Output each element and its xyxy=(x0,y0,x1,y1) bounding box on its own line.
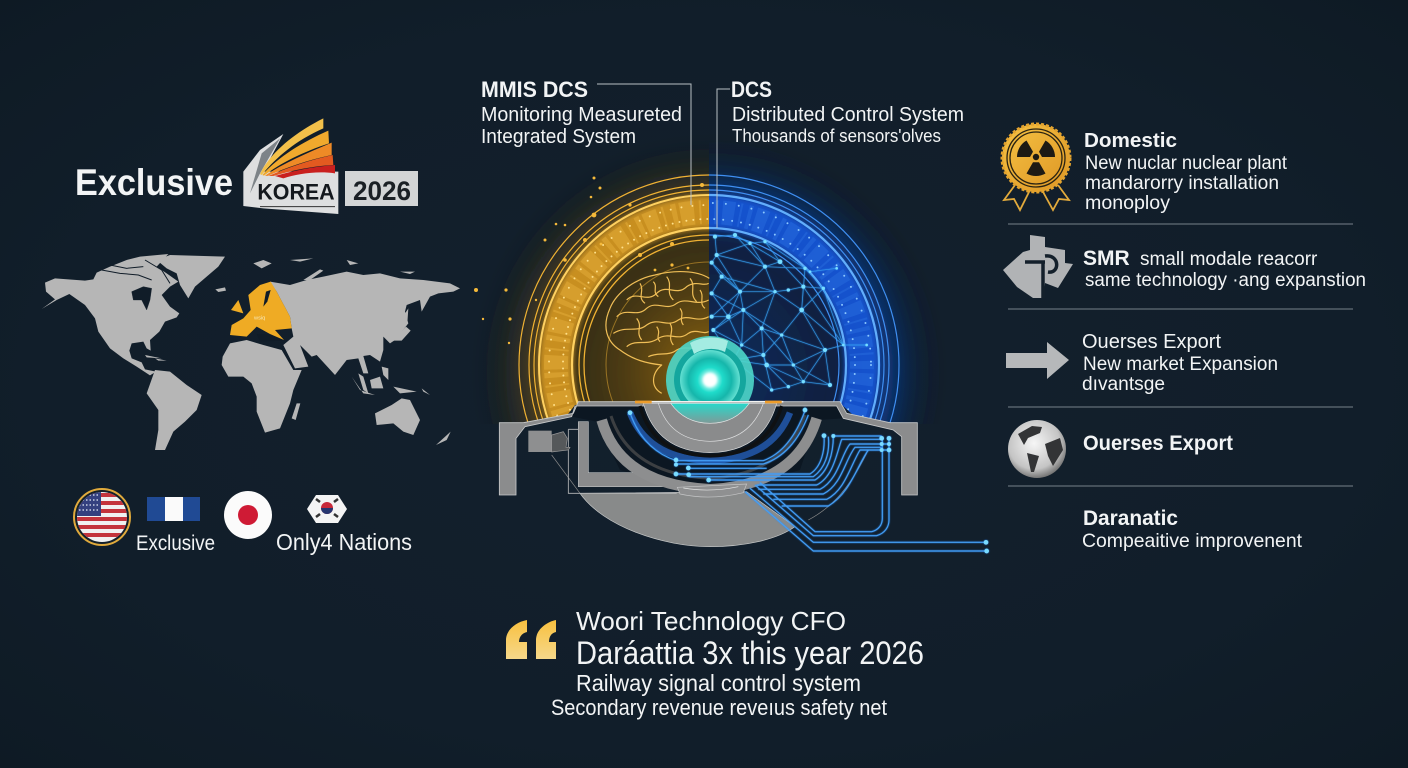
lower bowl xyxy=(580,492,795,547)
deck highlight xyxy=(635,399,783,404)
item: overseas export with globe xyxy=(1008,420,1233,478)
item: Daranatic: Daranatic xyxy=(1083,507,1178,530)
control wiring xyxy=(628,408,989,553)
label: MMIS DCS xyxy=(481,77,682,148)
North America xyxy=(42,254,179,375)
icon: SMR emblem xyxy=(1003,235,1073,298)
icon: arrow xyxy=(1006,342,1069,379)
item: overseas export with globe: Ouerses Export xyxy=(1083,432,1233,455)
badge: 2026: 2026 xyxy=(353,176,411,206)
brain outline xyxy=(606,272,709,393)
New Zealand xyxy=(436,432,451,445)
world map xyxy=(42,254,460,450)
gold half glow xyxy=(500,162,709,422)
item: Domestic: monoploy xyxy=(1085,193,1171,214)
Japan xyxy=(393,308,411,341)
label: DCS xyxy=(731,77,964,146)
panel: exclusive Korea heading xyxy=(75,118,418,214)
divider xyxy=(1008,308,1353,310)
icon: blue white flag xyxy=(147,497,200,521)
item: Daranatic: Compeaitive improvenent xyxy=(1082,530,1303,552)
item: SMR xyxy=(1003,235,1366,298)
item: overseas export with arrow: New market Expansion xyxy=(1083,353,1278,375)
icon: globe xyxy=(1008,420,1066,478)
divider xyxy=(1008,485,1353,487)
logo: Korea book fan xyxy=(243,118,338,214)
item: SMR: SMR small modale reacorr xyxy=(1083,247,1318,270)
reactor housing xyxy=(499,402,989,553)
Iceland and small north Atlantic islands xyxy=(215,260,272,292)
item: overseas export with arrow: Ouerses Export xyxy=(1082,330,1221,353)
gold sparks xyxy=(474,176,704,344)
icon: radiation medal xyxy=(1002,124,1070,210)
panel: CFO quote: Woori Technology CFO xyxy=(576,606,846,636)
logo: Korea book fan: KOREA xyxy=(257,179,335,204)
Arctic Russia xyxy=(290,258,415,280)
item: SMR: same technology ·ang expanstion xyxy=(1085,270,1366,291)
item: Domestic: New nuclar nuclear plant xyxy=(1085,153,1288,174)
Asia xyxy=(270,272,460,375)
Australia xyxy=(375,398,420,435)
gold ring xyxy=(518,174,709,422)
label: DCS: Thousands of sensors'olves xyxy=(732,126,941,146)
Madagascar xyxy=(292,403,300,420)
dark interior xyxy=(572,406,843,487)
Hudson Bay and arctic channels xyxy=(102,260,170,310)
item: Daranatic xyxy=(1082,507,1303,552)
leader lines xyxy=(597,84,730,228)
icon: Korea flag xyxy=(307,495,347,523)
item: overseas export with arrow: dıvantsge xyxy=(1082,374,1165,395)
reactor core orb xyxy=(666,336,754,401)
blue band xyxy=(630,413,790,461)
icon: Japan flag xyxy=(224,491,272,539)
left pipe section xyxy=(578,422,677,487)
Malay peninsula xyxy=(358,373,368,393)
label: MMIS DCS: MMIS DCS xyxy=(481,77,588,102)
item: Domestic xyxy=(1002,124,1288,214)
label: Only4 Nations: Only4 Nations xyxy=(276,529,412,555)
bottom cap xyxy=(677,484,747,497)
concentric bowl xyxy=(602,418,817,489)
Greenland xyxy=(157,255,225,298)
item: overseas export with arrow xyxy=(1006,330,1278,395)
panel: right-side benefit list xyxy=(1002,124,1366,552)
label: Exclusive: Exclusive xyxy=(136,532,215,555)
Europe highlight xyxy=(230,282,292,340)
left actuator box xyxy=(528,431,552,452)
divider xyxy=(1008,406,1353,408)
label: DCS: DCS xyxy=(731,77,772,102)
sensor network xyxy=(710,233,868,392)
blue half glow xyxy=(709,158,923,422)
label: MMIS DCS: Integrated System xyxy=(481,126,636,148)
world map: wsiq xyxy=(253,315,265,321)
outer shell and top deck xyxy=(499,402,917,495)
item: Domestic: Domestic xyxy=(1084,130,1177,152)
South East Asia islands xyxy=(352,367,430,395)
panel: CFO quote: Secondary revenue reveıus safety net xyxy=(551,695,887,720)
item: Domestic: mandarorry installation xyxy=(1085,173,1279,194)
panel: four nations flags xyxy=(74,489,412,555)
Caribbean xyxy=(145,355,167,361)
panel: CFO quote xyxy=(506,606,924,720)
inner bowl xyxy=(643,403,777,453)
blue ring xyxy=(709,174,900,422)
South America xyxy=(147,370,202,450)
panel: CFO quote: Daráattia 3x this year 2026 xyxy=(576,635,924,671)
panel: CFO quote: Railway signal control system xyxy=(576,670,861,696)
Africa xyxy=(222,340,302,433)
label: MMIS DCS: Monitoring Measureted xyxy=(481,104,682,126)
icon: US flag xyxy=(74,489,130,545)
icon: quotation mark xyxy=(506,620,556,659)
label: DCS: Distributed Control System xyxy=(732,104,964,126)
panel: central reactor diagram xyxy=(474,77,989,555)
divider xyxy=(1008,223,1353,225)
heading: Exclusive: Exclusive xyxy=(75,162,233,203)
